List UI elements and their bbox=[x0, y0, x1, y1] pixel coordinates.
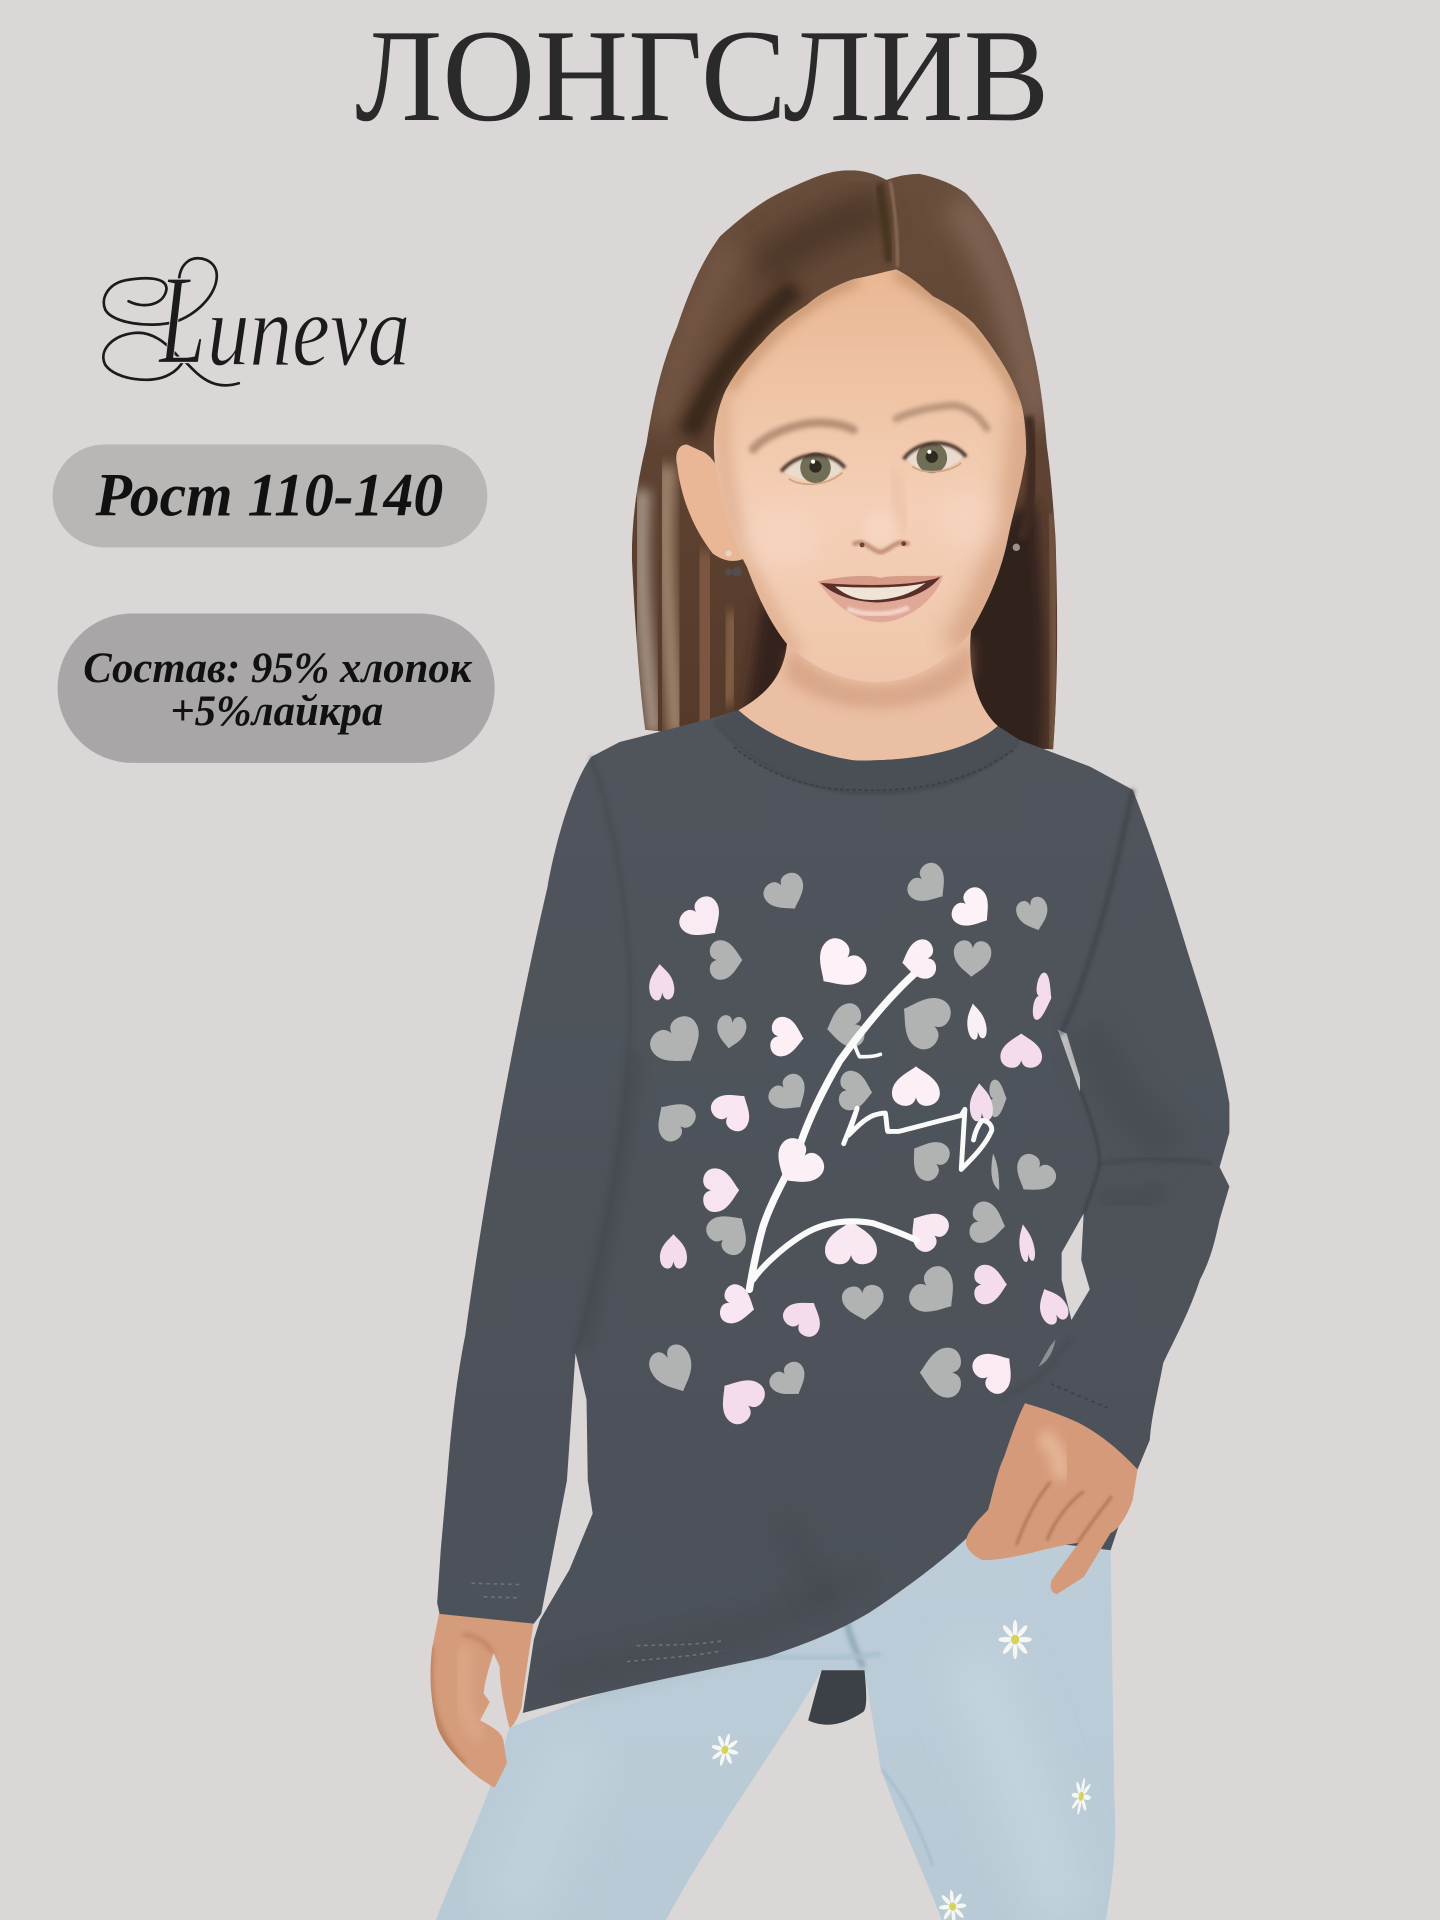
composition badge: +5%лайкра bbox=[170, 688, 383, 735]
face edge shading bbox=[722, 272, 1026, 655]
left eye bbox=[781, 452, 845, 484]
composition badge: Состав: 95% хлопок bbox=[83, 645, 473, 692]
print: hearts bbox=[645, 858, 1072, 1429]
longsleeve shirt bbox=[437, 710, 1229, 1713]
shirt back hem bbox=[808, 1670, 866, 1725]
logo: Luneva: uneva bbox=[207, 274, 410, 388]
fabric folds bbox=[551, 1573, 869, 1678]
arrow-tip hearts bbox=[718, 938, 938, 1329]
white line drawing bbox=[749, 973, 992, 1289]
nose bbox=[855, 471, 907, 552]
earrings bbox=[725, 544, 1020, 577]
face bbox=[714, 269, 1026, 682]
pink and white hearts bbox=[647, 883, 1072, 1429]
logo: Luneva: L bbox=[158, 249, 206, 390]
hair crown shading bbox=[759, 208, 884, 276]
photo: girl in longsleeve bbox=[429, 159, 1229, 1920]
cuff stitches bbox=[471, 1583, 520, 1598]
sleeve shading bbox=[1087, 1029, 1176, 1145]
left hand bbox=[429, 1611, 534, 1788]
neck bbox=[738, 612, 998, 761]
logo: Luneva bbox=[103, 249, 410, 390]
hair left lock highlights bbox=[641, 490, 654, 735]
right hand bbox=[966, 1403, 1138, 1594]
left ear bbox=[676, 444, 744, 561]
collar bbox=[714, 710, 1019, 794]
composition badge bbox=[58, 613, 495, 763]
daisy embroidery bbox=[707, 1620, 1094, 1920]
mouth bbox=[818, 576, 943, 622]
right cuff stitches bbox=[1051, 1384, 1108, 1408]
hair right dark lock bbox=[961, 502, 1044, 759]
hair bbox=[632, 170, 1058, 750]
height badge bbox=[53, 444, 487, 547]
right arm gap bbox=[1062, 1213, 1090, 1320]
silver glitter hearts bbox=[645, 858, 1060, 1405]
underarm gap bbox=[1058, 1030, 1080, 1092]
eyebrows bbox=[753, 423, 853, 449]
hem stitches bbox=[627, 1641, 722, 1662]
right eye bbox=[904, 443, 966, 473]
title: ЛОНГСЛИВ bbox=[355, 2, 1049, 149]
sleeve seams bbox=[576, 757, 631, 1353]
neck shadow bbox=[784, 637, 972, 709]
jeans bbox=[436, 1531, 1115, 1920]
height badge: Рост 110-140 bbox=[95, 462, 443, 530]
